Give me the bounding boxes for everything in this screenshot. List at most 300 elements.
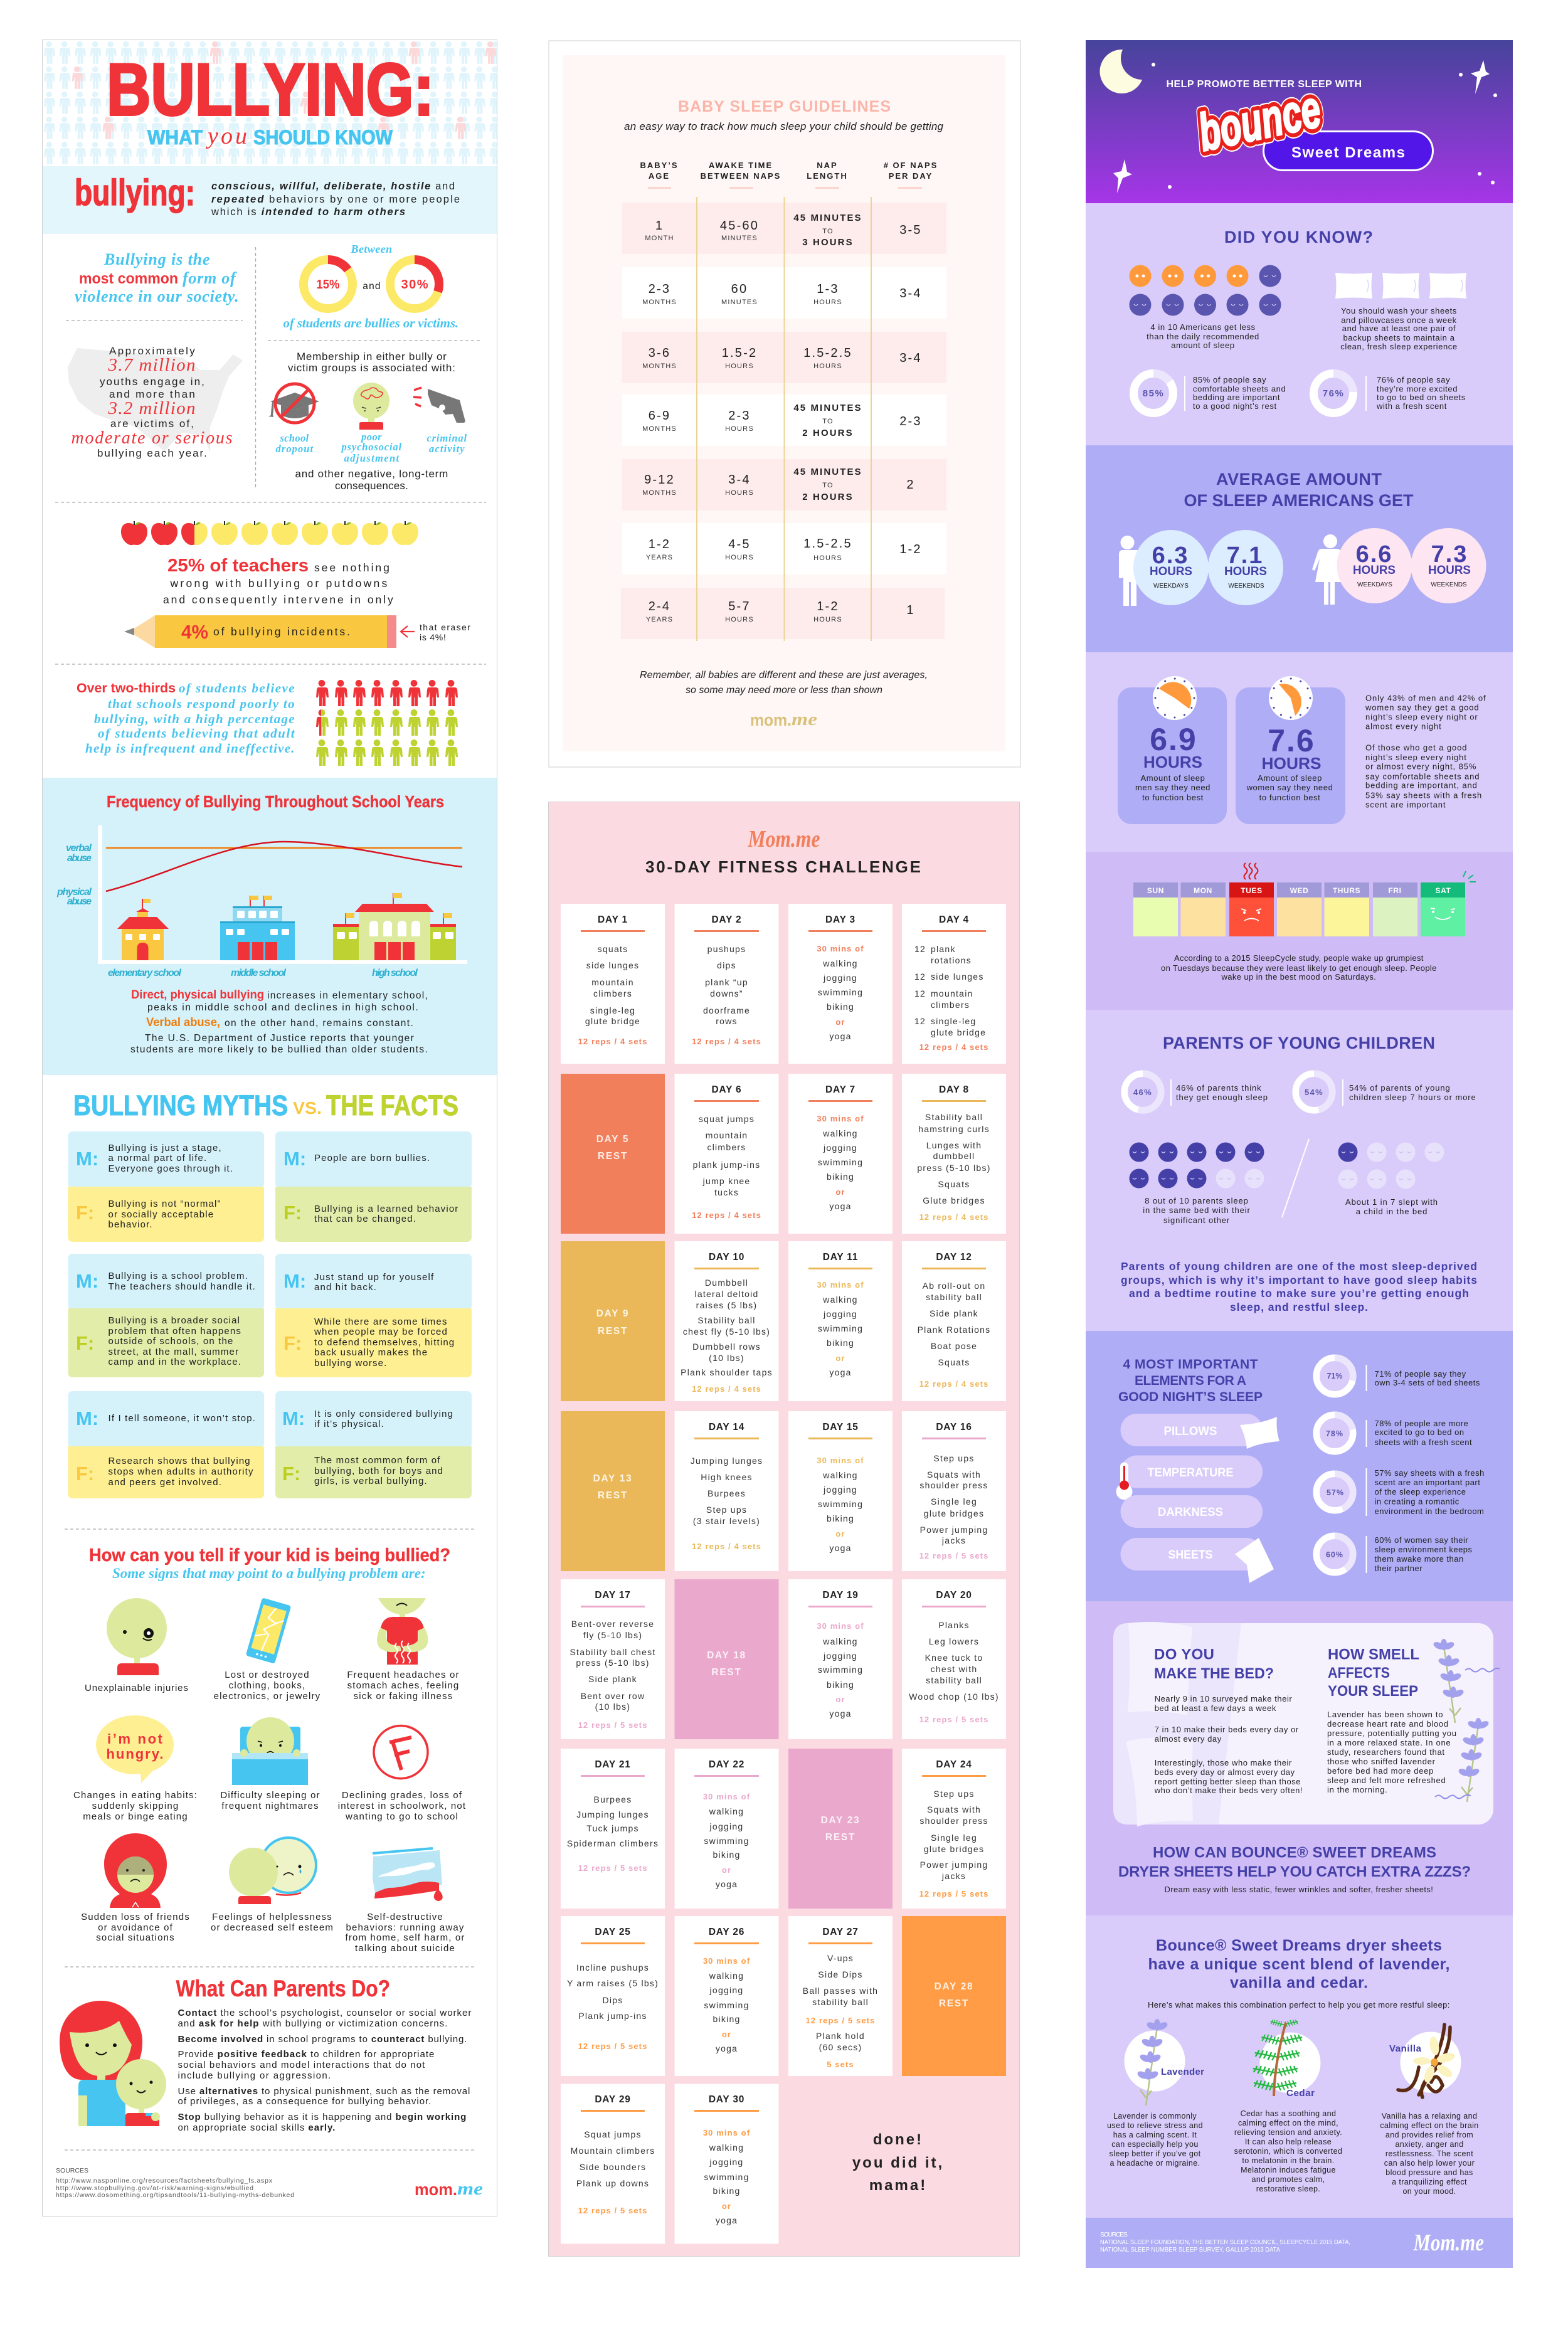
column: nap length: 45 MINUTES xyxy=(793,467,862,477)
day 17: DAY 17 xyxy=(595,1590,631,1601)
map of USA with statistics: 3.2 million xyxy=(108,398,197,418)
myth card 5: Research shows that bullying xyxy=(108,1456,251,1466)
section: did you know xyxy=(1086,203,1513,445)
myth card 4: to defend themselves, hitting xyxy=(314,1337,455,1348)
column: nap length: HOURS xyxy=(813,554,842,562)
text: wash sheets: and pillowcases once a week xyxy=(1341,315,1457,325)
day 22: walking xyxy=(709,1806,744,1816)
day 8: hamstring curls xyxy=(918,1124,990,1134)
column: awake time: 60 xyxy=(731,282,748,296)
day 16: Step ups xyxy=(933,1453,975,1463)
day 24: Power jumping xyxy=(920,1860,988,1870)
myth card 2: that can be changed. xyxy=(314,1214,416,1224)
text: 46%: they get enough sleep xyxy=(1176,1093,1268,1102)
text: 78%: 78% of people are more xyxy=(1375,1419,1468,1428)
day 16: 12 reps / 5 sets xyxy=(919,1551,988,1560)
day 7: or xyxy=(835,1187,845,1197)
myth card 1: Bullying is just a stage, xyxy=(108,1143,222,1153)
text: between: Between xyxy=(350,243,393,255)
day 8: DAY 8 xyxy=(939,1084,969,1095)
chart explanation text: Verbal abuse, xyxy=(146,1016,220,1029)
icon: man xyxy=(1118,536,1141,606)
myth card 1: M: xyxy=(76,1148,98,1170)
column: awake time: MINUTES xyxy=(721,299,758,306)
myth card 4: and hit back. xyxy=(314,1282,377,1293)
column: nap length: 1.5-2.5 xyxy=(803,537,852,551)
day 4: mountain xyxy=(931,988,973,998)
day 5 rest: REST xyxy=(598,1151,628,1162)
day 19: or xyxy=(835,1695,845,1704)
day 21: Burpees xyxy=(594,1794,632,1804)
heading: catch extra zzzs: HOW CAN BOUNCE® SWEET DREAMS xyxy=(1153,1844,1436,1862)
text: 60%: 60% of women say their xyxy=(1375,1535,1468,1545)
day 7: walking xyxy=(822,1128,858,1138)
text: lavender: can especially help you xyxy=(1111,2140,1199,2149)
day 17: Side plank xyxy=(588,1674,637,1684)
text: 78%: sheets with a fresh scent xyxy=(1375,1438,1472,1447)
icon: pillows xyxy=(1335,273,1466,299)
text: make the bed: almost every day xyxy=(1155,1734,1222,1744)
day 10: lateral deltoid xyxy=(694,1289,759,1299)
donut 60%: 60% xyxy=(1326,1550,1343,1559)
day 10: chest fly (5-10 lbs) xyxy=(683,1327,770,1337)
text: consequences: consequences. xyxy=(335,480,409,492)
myth card 6: It is only considered bullying xyxy=(314,1409,453,1419)
section: parents of young children xyxy=(1086,1010,1513,1331)
text: sleepcycle study: According to a 2015 SleepCycle study, people wake up grumpiest xyxy=(1174,953,1424,963)
day 24: glute bridges xyxy=(924,1844,984,1854)
day 17: (10 lbs) xyxy=(595,1702,630,1712)
day 13 rest: DAY 13 xyxy=(593,1473,632,1484)
crowd pattern header xyxy=(43,40,497,166)
day 3: jogging xyxy=(823,973,857,983)
parents advice text: and ask for help with bullying or victimization concerns. xyxy=(178,2018,448,2029)
day 24: Step ups xyxy=(933,1789,975,1799)
donut 78% xyxy=(1316,1415,1353,1451)
day 12: Side plank xyxy=(930,1308,978,1318)
myth card 3: The teachers should handle it. xyxy=(108,1281,256,1292)
map of USA with statistics: youths engage in, xyxy=(100,376,205,388)
donut 85%: 85% xyxy=(1143,388,1164,399)
day 8: 12 reps / 4 sets xyxy=(919,1212,988,1222)
column: nap length: HOURS xyxy=(813,299,842,306)
column: nap length: 3 HOURS xyxy=(802,237,854,248)
icon: cracked phone xyxy=(246,1597,291,1664)
icon: speech bubble: i’m not xyxy=(107,1731,163,1747)
captions row 2: wanting to go to school xyxy=(345,1811,458,1822)
text: most common form of violence: most common xyxy=(79,270,178,287)
subtitle: an easy way to track how much sleep your child should be getting xyxy=(624,120,944,132)
header band xyxy=(1086,40,1513,203)
icon labels: poor xyxy=(360,431,383,443)
donut 54% xyxy=(1296,1074,1332,1110)
sources: SOURCES xyxy=(1100,2231,1128,2238)
column: nap length: HOURS xyxy=(813,363,842,370)
day 4: rotations xyxy=(931,955,972,965)
myth card 1: a normal part of life. xyxy=(108,1153,207,1163)
column: awake time: 4-5 xyxy=(728,538,751,551)
calendar xyxy=(1133,863,1476,936)
paragraph: sleep-deprived xyxy=(1121,1260,1477,1313)
day 24: DAY 24 xyxy=(936,1759,972,1770)
day 2: downs” xyxy=(710,988,743,998)
captions row 3: Feelings of helplessness xyxy=(212,1912,332,1922)
day 10 xyxy=(681,1252,773,1394)
day 3 xyxy=(808,914,872,1041)
chart explanation text: Direct, physical bullying xyxy=(131,988,264,1002)
day 11: walking xyxy=(822,1295,858,1305)
calendar: SUN xyxy=(1147,886,1164,895)
women weekdays bubble xyxy=(1337,528,1412,603)
icon: stars and dots xyxy=(1113,60,1497,193)
card: men: 6.9 xyxy=(1150,722,1197,757)
myth card 6: if it’s physical. xyxy=(314,1419,384,1429)
day 24: Single leg xyxy=(931,1833,977,1843)
pill: darkness xyxy=(1120,1495,1263,1528)
text: vanilla: calming effect on the brain xyxy=(1380,2121,1479,2130)
women weekends bubble: HOURS xyxy=(1428,564,1471,577)
card: women: Amount of sleep xyxy=(1258,773,1322,783)
myth card 3: Bullying is a broader social xyxy=(108,1315,240,1326)
day 22: yoga xyxy=(716,1879,738,1889)
day 26: walking xyxy=(709,1971,744,1981)
day 11: biking xyxy=(827,1338,854,1348)
text: make the bed: 7 in 10 make their beds every day or xyxy=(1155,1725,1299,1734)
text: smell: study, researchers found that xyxy=(1327,1747,1445,1757)
day 19: jogging xyxy=(823,1651,857,1661)
day 11: swimming xyxy=(818,1323,863,1333)
myth card 3: camp and in the workplace. xyxy=(108,1357,241,1367)
heading: how can you tell: How can you tell if your kid is being bullied? xyxy=(89,1545,450,1565)
section: make the bed and smell xyxy=(1086,1601,1513,1915)
heading: make the bed xyxy=(1154,1646,1274,1682)
text: most common form of violence xyxy=(75,250,240,305)
day 15: or xyxy=(835,1529,845,1539)
card backgrounds xyxy=(561,904,1006,2244)
title: BABY SLEEP GUIDELINES xyxy=(678,98,891,115)
column: awake time: HOURS xyxy=(725,425,754,433)
pencil xyxy=(124,615,396,648)
day 1 xyxy=(578,914,647,1046)
calendar: WED xyxy=(1290,886,1308,895)
day 17: press (5-10 lbs) xyxy=(576,1658,650,1668)
day 4: 12 xyxy=(914,972,926,982)
text: 4 in 10: than the daily recommended xyxy=(1147,332,1259,341)
day 6: mountain xyxy=(706,1130,748,1140)
day 1: squats xyxy=(598,944,628,954)
myth card 6: girls, is verbal bullying. xyxy=(314,1476,428,1486)
day 29: Squat jumps xyxy=(584,2129,642,2139)
column: nap length: 2 HOURS xyxy=(802,492,854,502)
day 27: 5 sets xyxy=(827,2060,854,2069)
day 29: Mountain climbers xyxy=(571,2146,655,2156)
day 16: Single leg xyxy=(931,1496,977,1507)
myth card 1: Bullying is not “normal” xyxy=(108,1199,221,1209)
heading: GOOD NIGHT’S SLEEP xyxy=(1118,1390,1263,1404)
sources: NATIONAL SLEEP FOUNDATION, THE BETTER SLEEP COUNCIL, SLEEPCYCLE 2015 DATA, xyxy=(1100,2238,1350,2246)
parents advice text: Stop bullying behavior as it is happening and begin working xyxy=(178,2112,467,2122)
myths vs facts heading: BULLYING MYTHS xyxy=(73,1089,288,1121)
day 18 rest: REST xyxy=(711,1667,742,1678)
column: nap length: TO xyxy=(822,418,834,425)
text: over two thirds xyxy=(77,681,295,756)
faces: 1 in 7 xyxy=(1338,1143,1444,1189)
day 12: Plank Rotations xyxy=(918,1325,990,1335)
captions row 1: stomach aches, feeling xyxy=(347,1680,459,1691)
captions row 1: electronics, or jewelry xyxy=(214,1691,320,1702)
day 23 rest xyxy=(788,1749,893,1909)
text: 1 in 7: a child in the bed xyxy=(1356,1207,1428,1216)
day 20: Knee tuck to xyxy=(925,1653,983,1663)
day 14: High knees xyxy=(701,1472,753,1482)
day 5 rest xyxy=(561,1074,665,1234)
icon labels: criminal xyxy=(426,432,468,444)
day 3: 30 mins of xyxy=(817,944,864,953)
day 2: rows xyxy=(716,1016,738,1026)
closing message xyxy=(852,2131,944,2194)
donut 15% xyxy=(304,260,352,309)
text: most common form of violence: violence in our society. xyxy=(75,287,240,305)
definition band: conscious, willful, deliberate, hostile and xyxy=(211,181,455,192)
day 2: DAY 2 xyxy=(712,914,741,925)
text: 57%: scent are an important part xyxy=(1375,1478,1480,1487)
day 25: 12 reps / 5 sets xyxy=(578,2042,647,2051)
day 19: yoga xyxy=(829,1708,852,1719)
high school building xyxy=(333,893,456,960)
text: vanilla: a tranquilizing effect xyxy=(1392,2178,1467,2186)
text: 46% xyxy=(1171,1079,1268,1106)
day 26: biking xyxy=(712,2014,741,2024)
icon: speech bubble xyxy=(96,1715,174,1783)
captions row 2: interest in schoolwork, not xyxy=(338,1801,466,1811)
paragraph: sleep-deprived: Parents of young children are one of the most sleep-deprived xyxy=(1121,1260,1477,1273)
day 2: pushups xyxy=(707,944,746,954)
product pill: Sweet Dreams xyxy=(1291,144,1405,161)
closing message: you did it, xyxy=(852,2154,944,2171)
day 26: 30 mins of xyxy=(703,1956,750,1966)
column: age: MONTHS xyxy=(642,363,677,370)
day 24: 12 reps / 5 sets xyxy=(919,1889,988,1899)
text: cedar: restorative sleep. xyxy=(1256,2185,1320,2193)
myths vs facts heading xyxy=(73,1089,458,1121)
day 22: swimming xyxy=(704,1836,750,1846)
myth card 5 xyxy=(68,1391,264,1498)
text: and: and xyxy=(363,281,381,292)
day 29 xyxy=(571,2094,655,2215)
captions row 2 xyxy=(73,1790,466,1822)
line: physical abuse xyxy=(106,842,462,891)
icon: lavender sprigs xyxy=(1433,1639,1500,1802)
text: 4 in 10 xyxy=(1147,322,1259,350)
day 6: 12 reps / 4 sets xyxy=(692,1210,761,1220)
day 17: Stability ball chest xyxy=(569,1647,656,1657)
day 8: Stability ball xyxy=(925,1112,983,1122)
day 25: Incline pushups xyxy=(576,1962,649,1973)
icon: no graduation cap xyxy=(268,384,319,423)
text: good sleep stats: or almost every night, 85% xyxy=(1365,761,1476,771)
definition band xyxy=(43,166,497,234)
text: 60%: them awake more than xyxy=(1375,1554,1464,1564)
title: BULLYING: xyxy=(107,48,434,130)
myth card 1: Everyone goes through it. xyxy=(108,1163,233,1174)
myth card 3: problem that often happens xyxy=(108,1326,241,1337)
pill: pillows: PILLOWS xyxy=(1164,1425,1217,1438)
column: age: 9-12 xyxy=(644,473,675,487)
day 17: fly (5-10 lbs) xyxy=(583,1630,642,1640)
day 4: DAY 4 xyxy=(939,914,969,925)
day 26: or xyxy=(722,2030,731,2039)
heading: OF SLEEP AMERICANS GET xyxy=(1184,491,1414,510)
calendar: SAT xyxy=(1436,886,1451,895)
sources xyxy=(1100,2231,1350,2254)
day 20: chest with xyxy=(931,1664,977,1674)
women weekdays bubble: HOURS xyxy=(1353,564,1396,577)
axis labels: abuse xyxy=(67,896,92,907)
heading: ELEMENTS FOR A xyxy=(1135,1374,1246,1388)
text: smell xyxy=(1327,1710,1457,1794)
day 4: glute bridge xyxy=(931,1027,986,1037)
day 1: side lunges xyxy=(586,960,639,970)
column: awake time: 5-7 xyxy=(728,600,751,613)
captions row 3: or decreased self esteem xyxy=(211,1922,334,1933)
text: 78%: excited to go to bed on xyxy=(1375,1427,1465,1437)
men weekdays bubble xyxy=(1133,530,1209,605)
donut 46%: 46% xyxy=(1133,1088,1152,1097)
text: good sleep stats: say comfortable sheets and xyxy=(1365,771,1480,781)
day 6: squat jumps xyxy=(699,1114,755,1124)
day 19: DAY 19 xyxy=(822,1590,859,1601)
day 6: jump knee xyxy=(702,1176,750,1186)
lavender illustration xyxy=(1124,2019,1204,2105)
column: naps per day: 2-3 xyxy=(899,415,922,428)
column: age: MONTHS xyxy=(642,489,677,497)
myth card 2: M: xyxy=(283,1148,306,1170)
chart explanation text: peaks in middle school and declines in high school. xyxy=(147,1002,419,1013)
map of USA with statistics: and more than xyxy=(109,388,196,400)
subtitle: you xyxy=(205,123,247,149)
text: good sleep stats: scent are important xyxy=(1365,800,1446,809)
day 4: 12 reps / 4 sets xyxy=(919,1042,988,1052)
map of USA with statistics: 3.7 million xyxy=(108,355,197,375)
donut 30%: 30% xyxy=(401,278,428,292)
day 24 xyxy=(919,1759,988,1899)
day 19: biking xyxy=(827,1680,854,1690)
column: age: MONTHS xyxy=(642,425,677,433)
day 20: stability ball xyxy=(926,1675,982,1685)
cedar illustration xyxy=(1253,2020,1321,2099)
day 9 rest: DAY 9 xyxy=(596,1308,629,1319)
axis labels xyxy=(56,843,92,907)
chart explanation text: on the other hand, remains constant. xyxy=(225,1018,414,1029)
text: cedar xyxy=(1234,2109,1342,2193)
day 8: Lunges with xyxy=(926,1140,982,1150)
elementary school building xyxy=(117,899,169,960)
donut 57% xyxy=(1316,1474,1353,1510)
day 30: walking xyxy=(709,2142,744,2153)
myth card 6: The most common form of xyxy=(314,1455,440,1466)
day 10: Dumbbell rows xyxy=(692,1342,761,1352)
day 14: DAY 14 xyxy=(709,1422,744,1433)
column: naps per day xyxy=(899,223,922,617)
day 13 rest: REST xyxy=(598,1490,628,1501)
text: 54% xyxy=(1343,1079,1476,1106)
day 6 xyxy=(692,1084,761,1220)
lavender illustration: Lavender xyxy=(1161,2067,1204,2077)
column: age: 2-3 xyxy=(649,282,670,296)
section: 4 most important elements xyxy=(1086,1331,1513,1601)
text: most common form of violence: form of xyxy=(183,269,237,287)
day 20: DAY 20 xyxy=(936,1590,972,1601)
text: vanilla: and provides relief from xyxy=(1385,2131,1473,2139)
day 27: V-ups xyxy=(827,1953,854,1963)
women weekends bubble: 7.3 xyxy=(1431,541,1468,568)
card background xyxy=(1113,1622,1493,1826)
day 16: Power jumping xyxy=(920,1525,988,1535)
column: nap length: TO xyxy=(822,482,834,489)
parents advice text: Contact the school’s psychologist, counselor or social worker xyxy=(178,2008,472,2018)
day 24: Squats with xyxy=(927,1804,981,1814)
day 27 xyxy=(803,1927,878,2069)
day 19: walking xyxy=(822,1636,858,1646)
calendar: FRI xyxy=(1388,886,1402,895)
text: make the bed: Interestingly, those who make their xyxy=(1155,1758,1292,1767)
text: 71%: 71% of people say they xyxy=(1375,1369,1466,1379)
column headers: BABY’S xyxy=(640,161,679,170)
myth card 4 xyxy=(275,1254,472,1377)
day 29: DAY 29 xyxy=(595,2094,631,2105)
day 7: jogging xyxy=(823,1143,857,1153)
logo: bounce xyxy=(1193,79,1326,162)
logo: bounce: bounce xyxy=(1193,79,1326,162)
men weekdays bubble: HOURS xyxy=(1150,565,1192,578)
text: make the bed: beds every day or almost every day xyxy=(1155,1767,1295,1777)
parents advice text: include bullying or aggression. xyxy=(178,2070,331,2081)
text: good sleep stats xyxy=(1365,694,1486,809)
day 22: DAY 22 xyxy=(709,1759,744,1770)
text: vanilla: on your mood. xyxy=(1402,2187,1456,2196)
text: 4 in 10: 4 in 10 Americans get less xyxy=(1150,322,1256,332)
text: sleepcycle study: on Tuesdays because they were least likely to get enough sleep. People xyxy=(1161,963,1437,973)
day 3: or xyxy=(835,1017,845,1027)
day 17: 12 reps / 5 sets xyxy=(578,1720,647,1730)
logo: mom.me xyxy=(415,2179,483,2199)
heading xyxy=(1118,1357,1263,1404)
day 1: 12 reps / 4 sets xyxy=(578,1037,647,1046)
text: cedar: It can also help release xyxy=(1245,2137,1332,2146)
day 10: Stability ball xyxy=(697,1315,756,1325)
day 3: yoga xyxy=(829,1031,852,1041)
icon: gun xyxy=(413,388,465,423)
day 10: Dumbbell xyxy=(705,1278,748,1288)
column headers: PER DAY xyxy=(889,171,933,181)
day 6: DAY 6 xyxy=(712,1084,741,1095)
day 15: yoga xyxy=(829,1543,852,1553)
text: 57%: 57% say sheets with a fresh xyxy=(1375,1468,1485,1478)
column headers xyxy=(640,161,938,189)
myth card 2 xyxy=(275,1131,472,1242)
captions row 1: Frequent headaches or xyxy=(347,1670,460,1680)
day 10: raises (5 lbs) xyxy=(696,1300,757,1310)
day 11 xyxy=(808,1252,872,1377)
column: awake time: HOURS xyxy=(725,363,754,370)
card: men: Amount of sleep xyxy=(1141,773,1205,783)
heading xyxy=(1148,1937,1450,1992)
donut 85% xyxy=(1134,374,1173,413)
day 23 rest: REST xyxy=(825,1832,856,1843)
sources: NATIONAL SLEEP NUMBER SLEEP SURVEY, GALLUP 2013 DATA xyxy=(1100,2246,1280,2254)
axis labels: abuse xyxy=(67,853,92,864)
subheading: Here’s what makes this combination perfect to help you get more restful sleep: xyxy=(1148,2000,1450,2010)
